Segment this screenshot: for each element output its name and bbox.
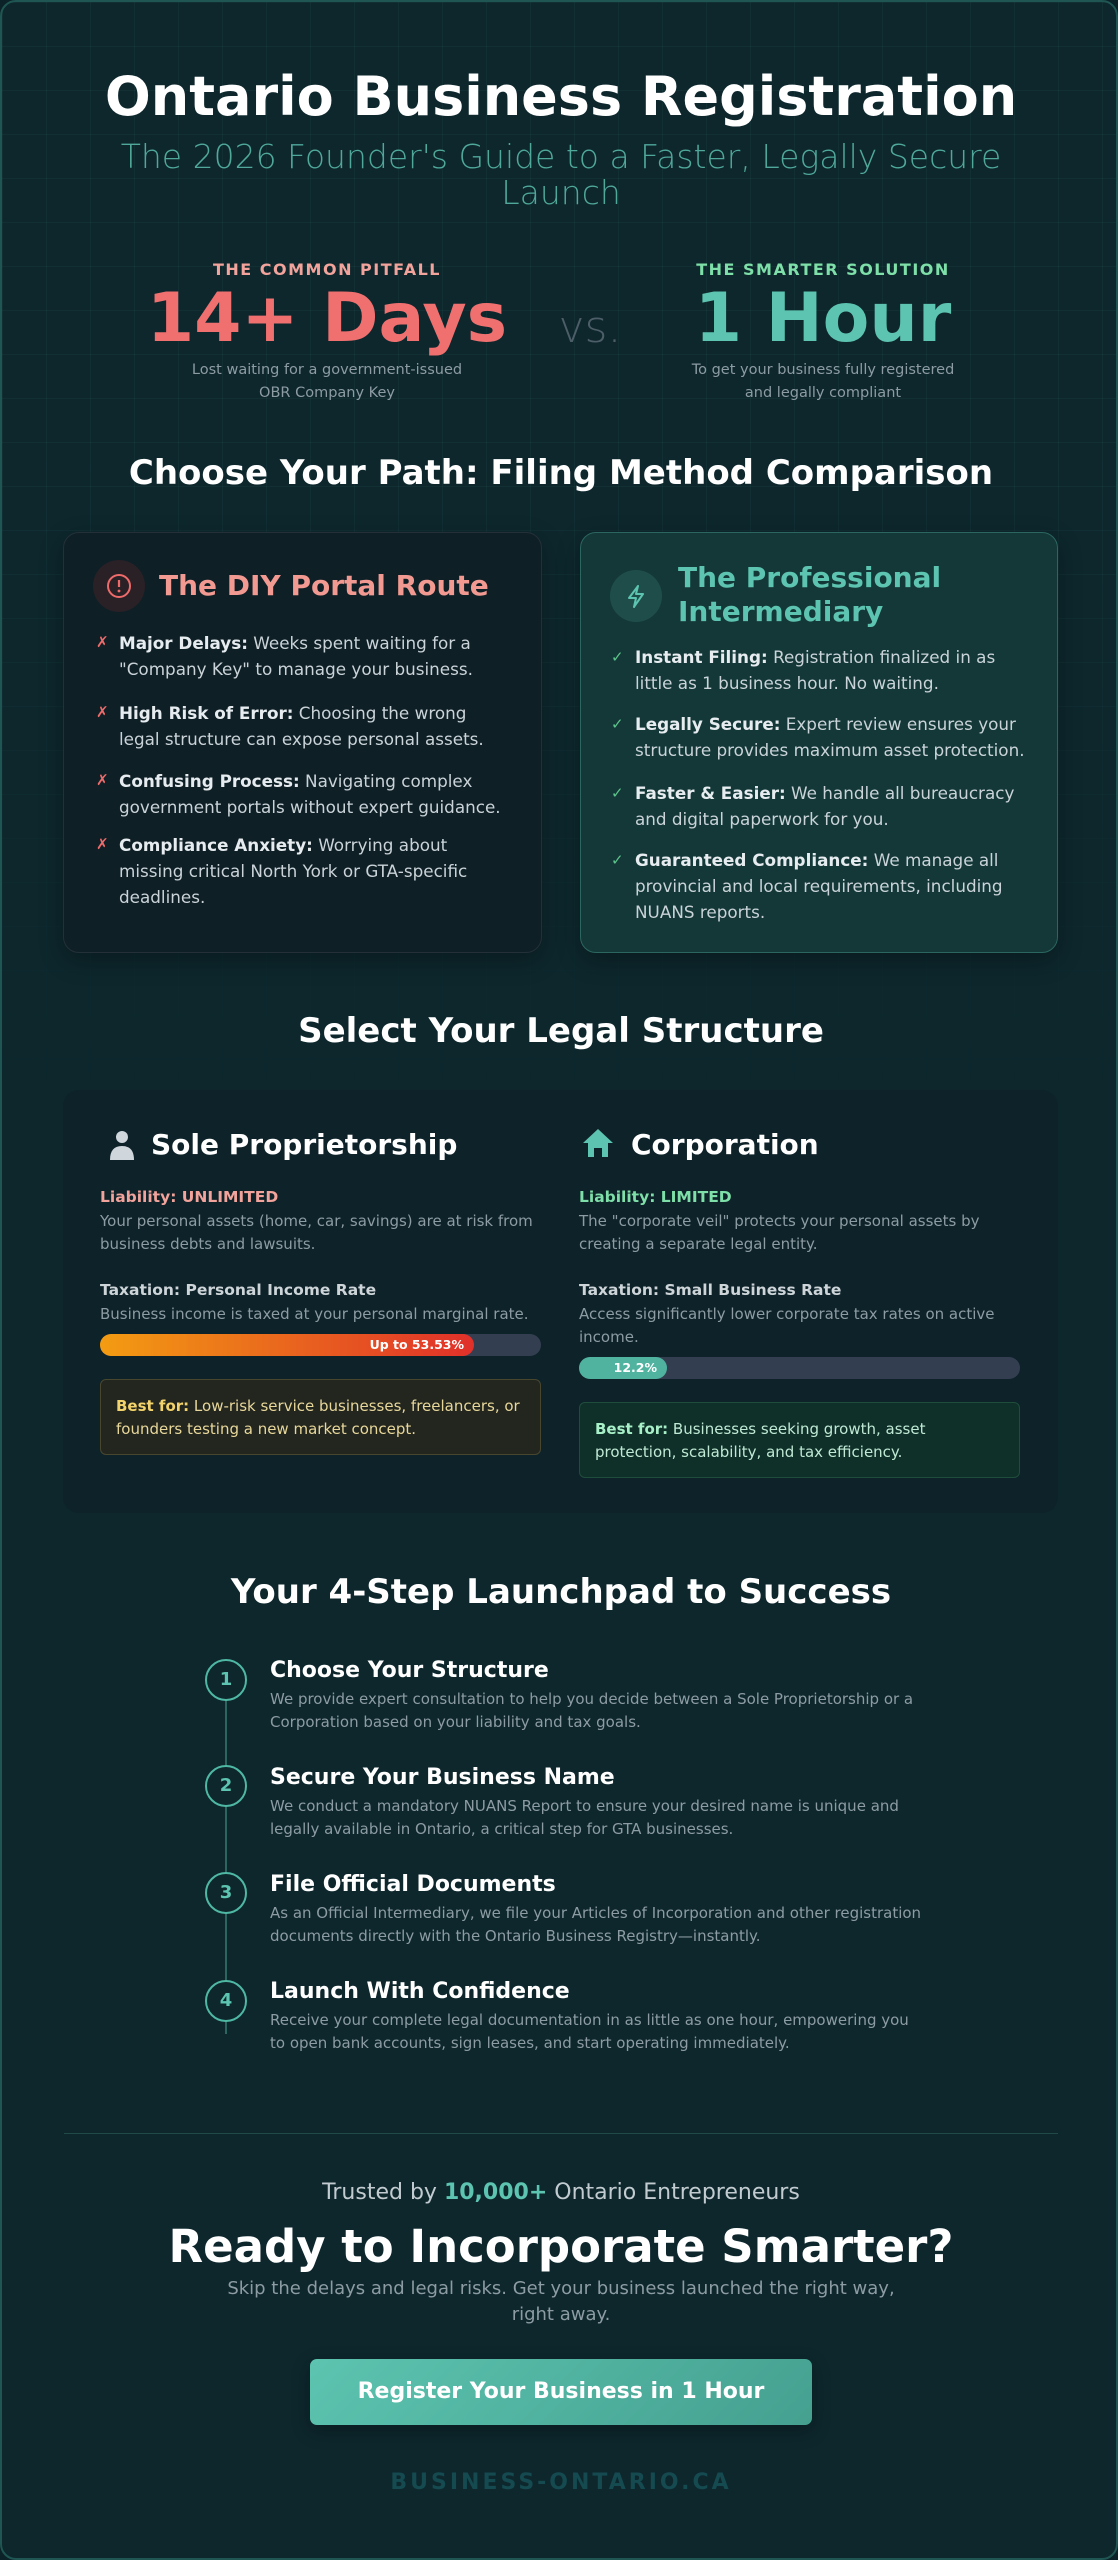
- callout: corporation best for: Best for: Businesses seeking growth, asset protection, scalability, and tax efficiency.: [595, 1420, 925, 1461]
- column: corporation: Access significantly lower corporate tax rates on active income.: [579, 1305, 995, 1346]
- column: sole proprietorship: Liability: UNLIMITED: [100, 1188, 278, 1206]
- heading: filing comparison: Choose Your Path: Filing Method Comparison: [129, 453, 993, 493]
- bar chart: personal tax rate: [100, 1334, 541, 1356]
- list: professional benefits: Faster & Easier: We handle all bureaucracy and digital paperwork for you.: [635, 783, 1014, 829]
- cta heading: Ready to Incorporate Smarter?: [168, 2220, 953, 2273]
- list: DIY drawbacks: High Risk of Error: Choosing the wrong legal structure can expose personal assets.: [119, 703, 484, 749]
- list: DIY drawbacks: Compliance Anxiety: Worrying about missing critical North York or GTA-specific deadlines.: [119, 835, 467, 907]
- stat: smarter solution: THE SMARTER SOLUTION: [696, 260, 950, 279]
- stat: common pitfall: [147, 260, 507, 401]
- stat: common pitfall: 14+ Days: [147, 279, 507, 358]
- stat: smarter solution: [692, 260, 954, 401]
- heading: DIY: The DIY Portal Route: [159, 569, 489, 602]
- stat: smarter solution: and legally compliant: [745, 385, 901, 401]
- heading: sole: Sole Proprietorship: [151, 1128, 457, 1161]
- icon: alert: [93, 560, 145, 612]
- title: Ontario Business Registration: [105, 65, 1017, 128]
- step 1: 1: [220, 1669, 232, 1690]
- button: register: [310, 2359, 812, 2425]
- panel: legal structure comparison: [63, 1090, 1058, 1513]
- list: professional benefits: ✓: [611, 648, 624, 666]
- step 3: As an Official Intermediary, we file your Articles of Incorporation and other registration documents directly with the Ontario Business Registry—instantly.: [270, 1904, 921, 1945]
- cta subtext: Skip the delays and legal risks. Get your business launched the right way, right away.: [227, 2278, 895, 2325]
- step 4: Receive your complete legal documentation in as little as one hour, empowering you to open bank accounts, sign leases, and start operating immediately.: [270, 2011, 909, 2052]
- stat: smarter solution: To get your business fully registered: [692, 362, 954, 378]
- list: DIY drawbacks: Major Delays: Weeks spent waiting for a "Company Key" to manage your business.: [119, 633, 473, 679]
- icon: house: [583, 1129, 613, 1157]
- heading: legal structure: Select Your Legal Structure: [298, 1011, 824, 1051]
- step 2: We conduct a mandatory NUANS Report to ensure your desired name is unique and legally available in Ontario, a critical step for GTA businesses.: [270, 1797, 899, 1838]
- heading: professional: [678, 561, 941, 628]
- list: professional benefits: ✓: [611, 851, 624, 869]
- column: sole proprietorship: Your personal assets (home, car, savings) are at risk from business debts and lawsuits.: [100, 1212, 533, 1253]
- callout: sole best for: [100, 1379, 541, 1455]
- step 1: We provide expert consultation to help you decide between a Sole Proprietorship or a Corporation based on your liability and tax goals.: [270, 1690, 913, 1731]
- icon: lightning: [610, 570, 662, 622]
- column: corporation: [578, 1128, 1020, 1478]
- bar chart: corporate tax rate: 12.2%: [614, 1360, 657, 1375]
- heading: professional: The Professional: [678, 561, 941, 594]
- step 3: File Official Documents: [270, 1872, 556, 1897]
- list: DIY drawbacks: Confusing Process: Navigating complex government portals without expert guidance.: [119, 771, 501, 817]
- list: DIY drawbacks: ✗: [96, 633, 109, 651]
- column: sole proprietorship: [100, 1128, 541, 1455]
- stat: smarter solution: 1 Hour: [695, 279, 951, 358]
- list: DIY drawbacks: ✗: [96, 835, 109, 853]
- list: professional benefits: Legally Secure: Expert review ensures your structure provides maximum asset protection.: [635, 714, 1025, 760]
- step 4: 4: [220, 1990, 232, 2011]
- subtitle: The 2026 Founder's Guide to a Faster, Legally Secure Launch: [121, 137, 1001, 212]
- list: DIY drawbacks: ✗: [96, 703, 109, 721]
- list: professional benefits: Guaranteed Compliance: We manage all provincial and local requirements, including NUANS reports.: [635, 850, 1003, 922]
- step 4: Launch With Confidence: [270, 1979, 570, 2004]
- callout: corporation best for: [579, 1402, 1020, 1478]
- column: corporation: Liability: LIMITED: [579, 1188, 732, 1206]
- step 2: Secure Your Business Name: [270, 1765, 615, 1790]
- list: professional benefits: [611, 647, 1025, 922]
- button: register: Register Your Business in 1 Hour: [358, 2379, 764, 2404]
- bar chart: personal tax rate: Up to 53.53%: [370, 1337, 464, 1352]
- stat: common pitfall: THE COMMON PITFALL: [213, 260, 441, 279]
- stat: common pitfall: Lost waiting for a government-issued: [192, 362, 462, 378]
- bar chart: corporate tax rate: [579, 1357, 1020, 1379]
- vs label: vs.: [559, 302, 621, 353]
- column: sole proprietorship: Taxation: Personal Income Rate: [100, 1281, 376, 1299]
- step 2: 2: [220, 1775, 232, 1796]
- heading: professional: Intermediary: [678, 595, 883, 628]
- icon: person: [110, 1131, 134, 1160]
- column: corporation: The "corporate veil" protects your personal assets by creating a separate legal entity.: [579, 1212, 980, 1253]
- list: professional benefits: Instant Filing: Registration finalized in as little as 1 business hour. No waiting.: [635, 647, 995, 693]
- heading: corporation: Corporation: [631, 1128, 819, 1161]
- trust line: Trusted by 10,000+ Ontario Entrepreneurs: [322, 2180, 800, 2205]
- step 1: Choose Your Structure: [270, 1658, 549, 1683]
- step 2: [205, 1765, 899, 1838]
- list: DIY drawbacks: [96, 633, 501, 907]
- callout: sole best for: Best for: Low-risk service businesses, freelancers, or founders testing a new market concept.: [116, 1397, 520, 1438]
- footer: website: BUSINESS-ONTARIO.CA: [390, 2470, 732, 2495]
- stat: common pitfall: OBR Company Key: [259, 385, 395, 401]
- panel: professional intermediary: [580, 532, 1058, 953]
- list: DIY drawbacks: ✗: [96, 771, 109, 789]
- timeline: steps: [225, 1700, 227, 2034]
- list: professional benefits: ✓: [611, 784, 624, 802]
- column: sole proprietorship: Business income is taxed at your personal marginal rate.: [100, 1305, 529, 1323]
- panel: DIY portal route: [63, 532, 542, 953]
- step 3: 3: [220, 1882, 232, 1903]
- step 3: [205, 1872, 921, 1945]
- step 4: [205, 1979, 909, 2052]
- step 1: [205, 1658, 913, 1731]
- heading: 4-step launchpad: Your 4-Step Launchpad to Success: [231, 1572, 891, 1612]
- column: corporation: Taxation: Small Business Rate: [579, 1281, 841, 1299]
- list: professional benefits: ✓: [611, 715, 624, 733]
